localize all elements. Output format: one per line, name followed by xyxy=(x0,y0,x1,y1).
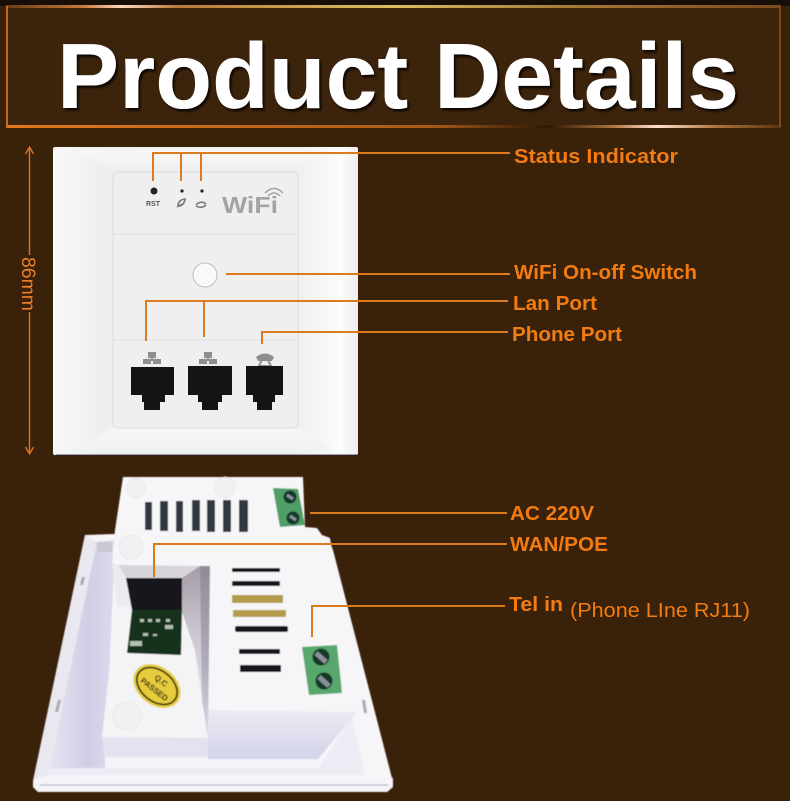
recess side wall xyxy=(200,566,210,738)
WiFi logo xyxy=(222,188,283,218)
lower left surface xyxy=(102,600,210,738)
phone port xyxy=(246,354,283,410)
housing front face xyxy=(208,710,357,759)
face plate xyxy=(53,147,358,455)
on-off button xyxy=(193,263,217,287)
label: WiFi On-off Switch: WiFi On-off Switch xyxy=(514,262,697,284)
front view of wall socket xyxy=(53,147,358,455)
QC PASSED sticker: Q.C xyxy=(153,673,170,689)
dimension: 86mm arrow: 86mm xyxy=(17,257,38,311)
WAN port xyxy=(126,578,182,610)
RST label: RST xyxy=(146,201,161,208)
label: Phone Port: Phone Port xyxy=(512,324,622,346)
back view of wall socket xyxy=(33,477,393,792)
lower left housing face xyxy=(102,737,210,757)
dimension: 86mm arrow xyxy=(17,147,38,454)
panel dividers xyxy=(113,234,298,340)
circuit board xyxy=(127,610,182,655)
recess back shade xyxy=(118,565,210,578)
bevel top xyxy=(75,150,335,172)
inner panel xyxy=(113,172,298,428)
base step xyxy=(105,757,318,768)
reset hole and LEDs xyxy=(150,188,204,194)
QC PASSED sticker xyxy=(125,655,189,717)
left rim shading xyxy=(33,535,97,781)
bevel bottom xyxy=(75,428,335,452)
phone terminal block xyxy=(302,645,342,695)
label: WAN/POE: WAN/POE xyxy=(510,534,608,556)
WiFi logo: WiFi xyxy=(222,192,278,218)
horizontal vents xyxy=(232,568,288,672)
title: Product Details xyxy=(57,24,739,128)
plate edge tint xyxy=(56,454,357,456)
back plate rim xyxy=(33,534,393,792)
status icons xyxy=(177,199,206,207)
notch in plate xyxy=(97,542,112,552)
tray floor xyxy=(48,540,115,775)
vent slots, top xyxy=(145,500,248,532)
label: Phone Line RJ11: (Phone LIne RJ11) xyxy=(570,600,750,622)
labels for front view xyxy=(512,146,697,346)
AC terminal block xyxy=(273,488,305,527)
labels for back view xyxy=(509,503,750,622)
plate slots xyxy=(55,577,367,713)
boss circles xyxy=(113,477,235,730)
LAN port 2 xyxy=(188,352,232,410)
callout lines for front view xyxy=(146,153,510,344)
QC PASSED sticker: PASSED xyxy=(139,676,170,703)
recess top left xyxy=(112,563,132,607)
label: AC 220V: AC 220V xyxy=(510,503,595,525)
main housing top xyxy=(112,477,357,712)
label: Tel in: Tel in xyxy=(509,594,563,616)
LAN port 1 xyxy=(131,352,174,410)
tray floor bottom xyxy=(48,717,365,775)
label: Status Indicator: Status Indicator xyxy=(514,146,678,168)
callout lines for back view xyxy=(154,513,507,637)
rim lip xyxy=(33,777,393,792)
top dark strip xyxy=(0,0,790,6)
recess shade xyxy=(182,566,208,738)
label: Lan Port: Lan Port xyxy=(513,293,597,315)
title banner frame xyxy=(6,5,781,128)
